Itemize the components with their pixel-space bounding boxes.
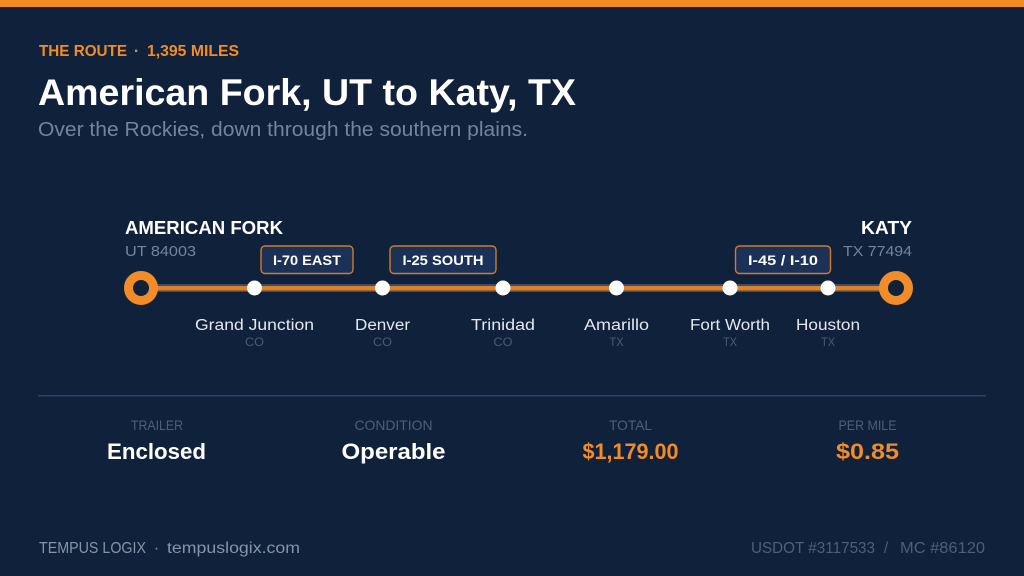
header	[38, 43, 576, 141]
company and website	[39, 540, 300, 557]
stat: trailer	[107, 417, 206, 464]
carrier numbers: MC #86120	[900, 540, 985, 557]
stop: Trinidad: CO	[494, 335, 512, 349]
stat: per mile: $0.85	[836, 439, 899, 464]
destination marker	[884, 276, 908, 300]
stop: Amarillo: TX	[610, 335, 624, 349]
company and website: ·	[154, 540, 159, 557]
stop: Houston	[796, 280, 860, 349]
stat: condition	[342, 417, 446, 464]
route diagram	[125, 218, 912, 349]
origin label	[125, 218, 283, 260]
stop: Houston: TX	[821, 335, 835, 349]
stop: Grand Junction: CO	[245, 335, 264, 349]
company and website: tempuslogix.com	[167, 540, 300, 557]
stop: Trinidad: Trinidad	[471, 317, 535, 334]
stat: total	[582, 417, 678, 464]
eyebrow: ·	[134, 43, 139, 60]
stop: Amarillo	[584, 280, 649, 349]
highway badge: I-45 / I-10: I-45 / I-10	[748, 252, 818, 268]
stop: Fort Worth: TX	[723, 335, 737, 349]
stop: Trinidad	[471, 280, 535, 349]
stat: condition: Operable	[342, 439, 446, 464]
eyebrow: 1,395 MILES	[147, 43, 239, 60]
route line	[141, 284, 896, 292]
stat: trailer: Enclosed	[107, 439, 206, 464]
stat: per mile: PER MILE	[838, 417, 896, 433]
eyebrow	[39, 43, 239, 60]
stop: Denver: Denver	[355, 317, 410, 334]
stat: per mile	[836, 417, 899, 464]
stop: Fort Worth: Fort Worth	[690, 317, 770, 334]
eyebrow: THE ROUTE	[39, 43, 127, 60]
origin label: UT 84003	[125, 243, 196, 260]
stop: Houston: Houston	[796, 317, 860, 334]
carrier numbers: /	[884, 540, 889, 557]
company and website: TEMPUS LOGIX	[39, 540, 147, 557]
destination label: TX 77494	[843, 243, 912, 260]
origin marker	[128, 276, 154, 300]
footer	[39, 540, 985, 557]
stat: condition: CONDITION	[354, 417, 432, 433]
stat: trailer: TRAILER	[131, 417, 183, 433]
highway badge: I-25 South: I-25 SOUTH	[402, 252, 484, 268]
stop: Denver	[355, 280, 410, 349]
highway badge: I-25 South	[390, 246, 496, 274]
stop: Grand Junction: Grand Junction	[195, 317, 314, 334]
highway badge: I-70 East	[261, 246, 353, 274]
stop: Denver: CO	[373, 335, 392, 349]
origin label: AMERICAN FORK	[125, 218, 283, 238]
stop: Grand Junction	[195, 280, 314, 349]
title: American Fork, UT to Katy, TX	[38, 72, 576, 113]
subtitle: Over the Rockies, down through the southern plains.	[38, 119, 528, 141]
highway badge: I-45 / I-10	[736, 246, 830, 274]
stop: Amarillo: Amarillo	[584, 317, 649, 334]
stats row	[107, 417, 899, 464]
top accent bar	[0, 0, 1024, 7]
destination label: KATY	[861, 218, 912, 238]
carrier numbers	[751, 540, 985, 557]
stat: total: TOTAL	[609, 417, 652, 433]
carrier numbers: USDOT #3117533	[751, 540, 875, 557]
highway badge: I-70 East: I-70 EAST	[273, 252, 341, 268]
stop: Fort Worth	[690, 280, 770, 349]
stat: total: $1,179.00	[582, 439, 678, 464]
destination label	[843, 218, 912, 260]
